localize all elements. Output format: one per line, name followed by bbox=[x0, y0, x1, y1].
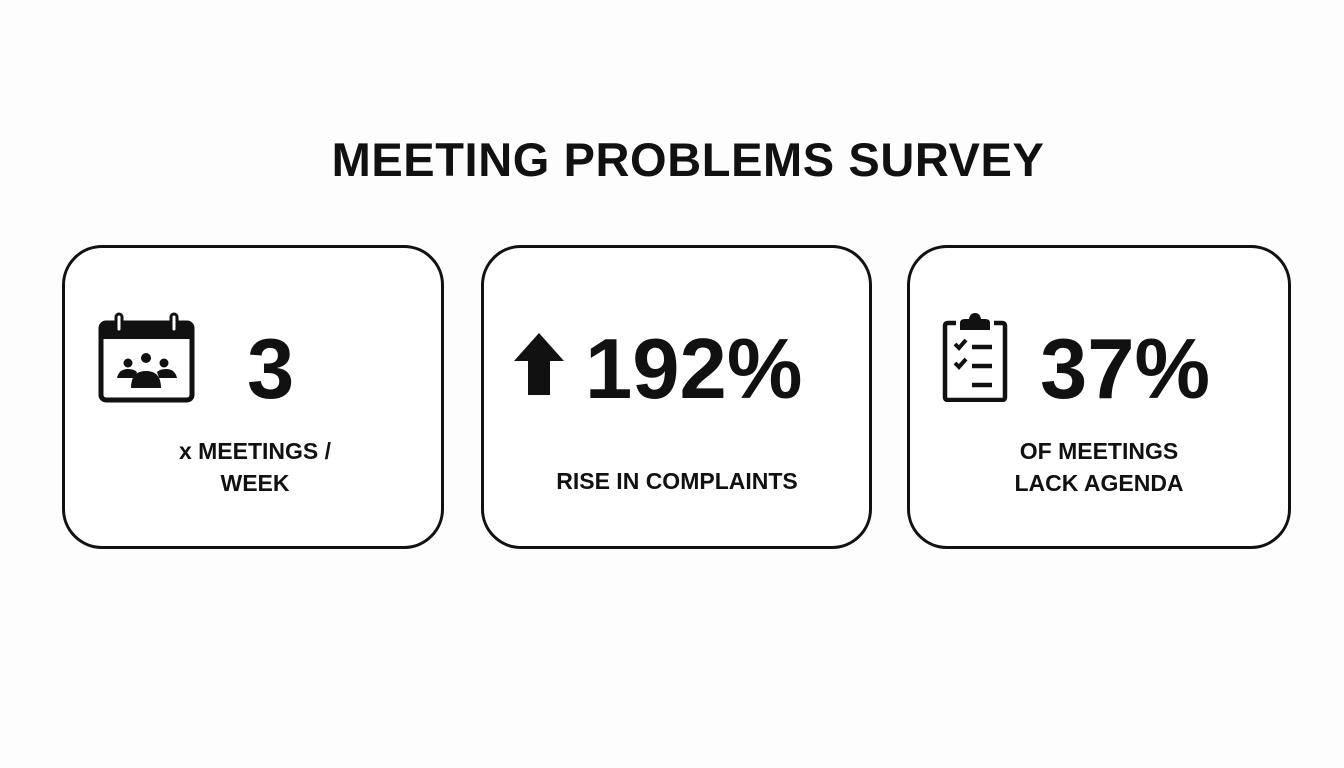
label: OF MEETINGS bbox=[1020, 438, 1178, 464]
label: x MEETINGS / bbox=[179, 438, 331, 464]
panel: complaints bbox=[481, 245, 872, 549]
panel: agenda bbox=[907, 245, 1291, 549]
label bbox=[179, 438, 331, 496]
label: RISE IN COMPLAINTS bbox=[556, 468, 798, 494]
label: WEEK bbox=[220, 470, 290, 496]
stat number: 37% bbox=[1040, 322, 1210, 417]
stat number: 192% bbox=[585, 322, 802, 417]
label bbox=[1014, 438, 1184, 496]
label: LACK AGENDA bbox=[1014, 470, 1184, 496]
panel: meetings per week bbox=[62, 245, 444, 549]
icon: calendar with people bbox=[98, 312, 194, 402]
stat number: 3 bbox=[247, 322, 294, 417]
icon: clipboard checklist bbox=[942, 313, 1008, 402]
title: MEETING PROBLEMS SURVEY bbox=[332, 133, 1044, 186]
icon: up arrow bbox=[514, 333, 564, 395]
